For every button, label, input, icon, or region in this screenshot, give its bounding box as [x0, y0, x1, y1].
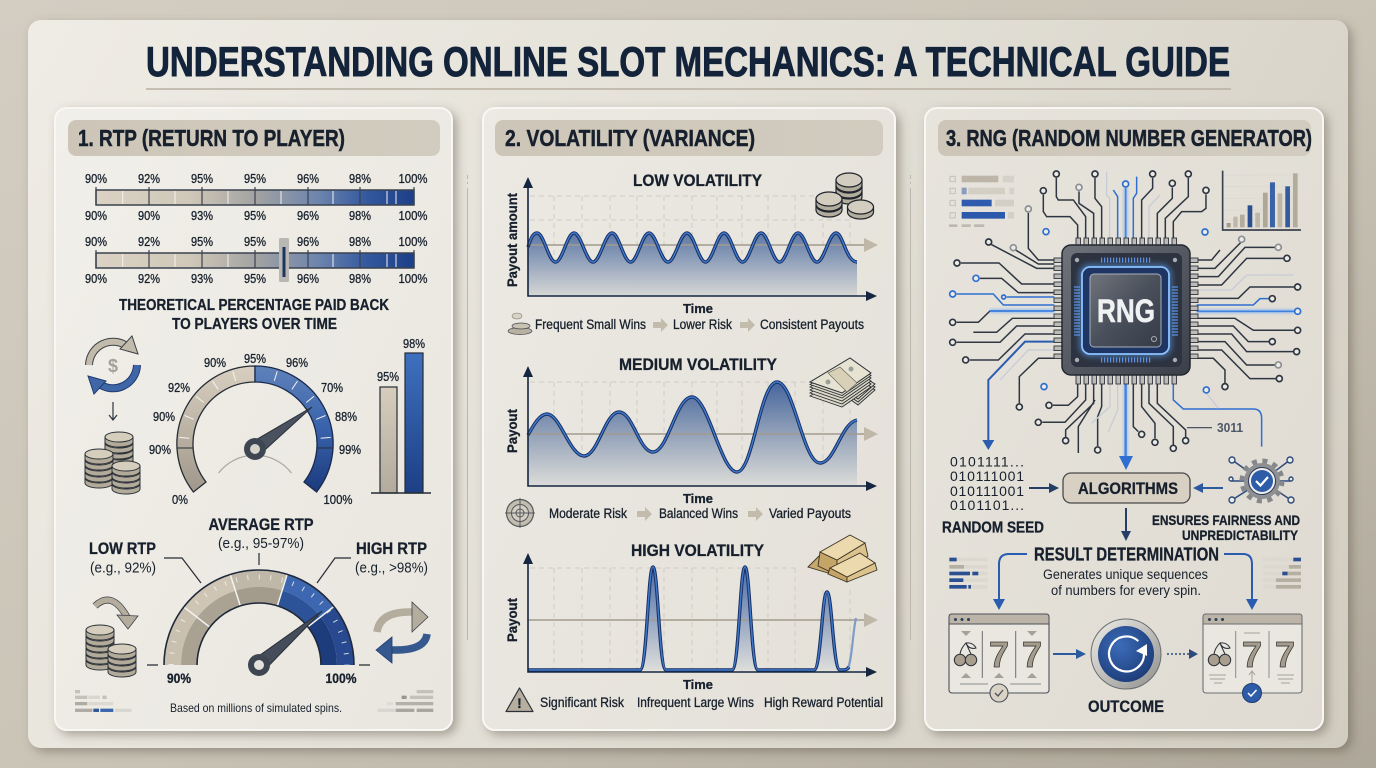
- icon: money cycle: $: [108, 356, 118, 376]
- legend: high volatility: High Reward Potential: [764, 695, 883, 710]
- RTP dial gauge: 88%: [335, 409, 357, 424]
- RTP scale bar 2 with marker: 100%: [398, 234, 428, 249]
- legend: low volatility: Frequent Small Wins: [535, 317, 646, 332]
- RTP dial gauge: 100%: [324, 492, 353, 507]
- label: 3011: [1187, 420, 1243, 435]
- legend: high volatility: Significant Risk: [540, 695, 624, 710]
- random seed: 0101111...: [950, 454, 1024, 470]
- heading: RNG: [938, 120, 1312, 156]
- RTP scale bar 1: 96%: [297, 171, 319, 186]
- result determination: RESULT DETERMINATION: [1034, 545, 1219, 565]
- fairness note: [1152, 512, 1300, 543]
- legend: high volatility: [506, 688, 883, 712]
- icon: coin stacks: [85, 432, 140, 494]
- random seed: 010111001: [950, 468, 1024, 484]
- RTP range gauge: 100%: [326, 670, 357, 686]
- RTP scale bar 2 with marker: 100%: [398, 271, 428, 286]
- RTP range gauge: [164, 570, 357, 686]
- heading: RTP: 1. RTP (RETURN TO PLAYER): [78, 125, 345, 151]
- arrow: result right: [1224, 554, 1258, 610]
- RTP scale bar 2 with marker: 93%: [191, 271, 213, 286]
- chart: high volatility: [505, 541, 878, 692]
- icon: high RTP cycle: [376, 602, 428, 663]
- labels: low RTP: [89, 539, 156, 576]
- RTP scale bar 1: 96%: [297, 208, 319, 223]
- legend: high volatility: Infrequent Large Wins: [637, 695, 754, 710]
- RTP scale bar 2 with marker: 95%: [244, 234, 266, 249]
- RTP scale bar 2 with marker: [85, 234, 428, 286]
- icon: coins: [816, 173, 874, 219]
- RTP scale bar 1: 90%: [85, 171, 107, 186]
- RTP dial gauge: 90%: [153, 409, 175, 424]
- random seed: 010111001: [950, 483, 1024, 499]
- chart: high volatility: Time: [683, 677, 713, 692]
- labels: high RTP: [355, 539, 428, 576]
- labels: low RTP: LOW RTP: [89, 539, 156, 558]
- RTP definition: TO PLAYERS OVER TIME: [172, 316, 337, 333]
- outcome label: OUTCOME: [1088, 697, 1164, 716]
- icon: money cycle: [88, 336, 138, 394]
- arrow: cycle to coins: [109, 402, 117, 420]
- panel: RNG: [925, 108, 1323, 730]
- labels: high RTP: (e.g., >98%): [355, 560, 428, 576]
- chart: medium volatility: Time: [683, 491, 713, 506]
- icon: gold bars: [808, 535, 877, 582]
- labels: average RTP: [208, 515, 314, 552]
- result determination: of numbers for every spin.: [1051, 583, 1201, 598]
- icon: low RTP coins and arrow: [86, 600, 138, 677]
- RTP scale bar 1: 95%: [191, 171, 213, 186]
- fairness note: UNPREDICTABILITY: [1182, 527, 1299, 543]
- RTP definition: [119, 297, 389, 333]
- chart: low volatility: LOW VOLATILITY: [633, 171, 763, 190]
- labels: average RTP: AVERAGE RTP: [208, 515, 314, 534]
- RTP dial gauge: 90%: [204, 355, 226, 370]
- chart: low volatility: Payout amount: [505, 193, 520, 287]
- labels: low RTP: (e.g., 92%): [90, 560, 156, 576]
- algorithms box: [1063, 473, 1190, 503]
- result determination: [1034, 545, 1219, 598]
- RTP dial gauge: 96%: [286, 355, 308, 370]
- RTP scale bar 1: 95%: [244, 171, 266, 186]
- RTP scale bar 1: 95%: [244, 208, 266, 223]
- icon: fairness gear: [1229, 457, 1294, 503]
- mini list chart: [949, 176, 1014, 227]
- chart: medium volatility: MEDIUM VOLATILITY: [619, 355, 778, 374]
- legend: low volatility: Lower Risk: [673, 317, 732, 332]
- panel: volatility: [483, 108, 895, 730]
- slot window right: 7: [1275, 634, 1295, 675]
- RTP scale bar 2 with marker: 92%: [138, 271, 160, 286]
- RTP range gauge: 90%: [167, 670, 191, 686]
- legend: low volatility: Consistent Payouts: [760, 317, 864, 332]
- trace nodes: [950, 171, 1301, 453]
- mini bar chart: [1223, 171, 1301, 230]
- needle: [248, 611, 322, 676]
- RTP dial gauge: 99%: [339, 442, 361, 457]
- arrow: outcome to slot: [1167, 649, 1198, 659]
- RTP scale bar 2 with marker: 90%: [85, 234, 107, 249]
- RTP scale bar 1: 93%: [191, 208, 213, 223]
- algorithms box: ALGORITHMS: [1078, 479, 1178, 498]
- bar comparison 95% vs 98%: [371, 336, 431, 493]
- RTP dial gauge: 70%: [321, 380, 343, 395]
- circuit traces: [950, 171, 1301, 463]
- slot window left: [949, 614, 1049, 702]
- chart: low volatility: [505, 171, 878, 316]
- RTP scale bar 1: 98%: [349, 171, 371, 186]
- RNG chip: [1054, 238, 1198, 384]
- mini data bars: [75, 690, 433, 712]
- heading: volatility: 2. VOLATILITY (VARIANCE): [505, 125, 755, 151]
- labels: high RTP: HIGH RTP: [356, 539, 427, 558]
- outcome button: [1091, 619, 1161, 689]
- arrow: seed to algorithms: [1029, 483, 1059, 493]
- legend: medium volatility: Varied Payouts: [769, 506, 851, 521]
- footer note: Based on millions of simulated spins.: [170, 701, 342, 715]
- chart: high volatility: Payout: [505, 598, 520, 642]
- RTP scale bar 1: 100%: [398, 171, 428, 186]
- RTP dial gauge: [149, 351, 361, 507]
- chart: medium volatility: [505, 355, 878, 506]
- arrowhead: chip to algorithms: [1119, 456, 1133, 470]
- mini data lists: [949, 558, 1301, 589]
- RTP scale bar 2 with marker: 98%: [349, 271, 371, 286]
- legend: high volatility: !: [517, 695, 522, 711]
- slot window left: 7: [1022, 634, 1042, 675]
- bar comparison 95% vs 98%: 95%: [377, 369, 399, 384]
- slot window right: 7: [1242, 634, 1262, 675]
- needle: [244, 407, 312, 460]
- legend: medium volatility: Balanced Wins: [659, 506, 738, 521]
- fairness note: ENSURES FAIRNESS AND: [1152, 512, 1300, 528]
- RTP dial gauge: 92%: [168, 380, 190, 395]
- icon: banknote stacks: [810, 358, 875, 407]
- random seed: [942, 454, 1044, 537]
- chart: medium volatility: Payout: [505, 409, 520, 453]
- arrow: gear to algorithms: [1193, 483, 1223, 493]
- RTP scale bar 1: 100%: [398, 208, 428, 223]
- RTP scale bar 2 with marker: 96%: [297, 271, 319, 286]
- chart: high volatility: HIGH VOLATILITY: [631, 541, 765, 560]
- heading: volatility: [495, 120, 883, 156]
- dark traces: [957, 178, 1294, 453]
- arrow: slot to outcome: [1053, 649, 1086, 659]
- legend: low volatility: [508, 313, 864, 334]
- RTP scale bar 2 with marker: 92%: [138, 234, 160, 249]
- RTP scale bar 1: [85, 171, 428, 223]
- heading: RTP: [68, 120, 440, 156]
- label: 3011: 3011: [1217, 420, 1243, 435]
- RTP scale bar 1: 92%: [138, 171, 160, 186]
- RTP scale bar 1: 98%: [349, 208, 371, 223]
- legend: medium volatility: Moderate Risk: [549, 506, 627, 521]
- RTP scale bar 1: 90%: [85, 208, 107, 223]
- slot window left: 7: [989, 634, 1009, 675]
- random seed: RANDOM SEED: [942, 520, 1044, 537]
- RTP scale bar 1: 90%: [138, 208, 160, 223]
- RTP dial gauge: 90%: [149, 442, 171, 457]
- blue traces: [957, 177, 1269, 447]
- RTP scale bar 2 with marker: 95%: [244, 271, 266, 286]
- RTP scale bar 2 with marker: 98%: [349, 234, 371, 249]
- RTP dial gauge: 95%: [244, 351, 266, 366]
- RTP definition: THEORETICAL PERCENTAGE PAID BACK: [119, 297, 389, 314]
- legend: medium volatility: [505, 498, 851, 528]
- random seed: 0101101...: [950, 497, 1024, 513]
- arrow: result left: [993, 554, 1027, 610]
- RTP scale bar 2 with marker: 90%: [85, 271, 107, 286]
- arrow: algorithms to result: [1121, 508, 1131, 541]
- bar comparison 95% vs 98%: 98%: [403, 336, 425, 351]
- labels: average RTP: (e.g., 95-97%): [218, 536, 304, 552]
- slot window right: [1203, 614, 1302, 702]
- result determination: Generates unique sequences: [1043, 567, 1208, 582]
- RTP scale bar 2 with marker: 96%: [297, 234, 319, 249]
- RTP scale bar 2 with marker: 95%: [191, 234, 213, 249]
- panel: RTP: [55, 108, 452, 730]
- chart: low volatility: Time: [683, 301, 713, 316]
- chip pins: [1054, 238, 1198, 384]
- RTP dial gauge: 0%: [172, 492, 188, 507]
- chip label: RNG: [1097, 293, 1155, 329]
